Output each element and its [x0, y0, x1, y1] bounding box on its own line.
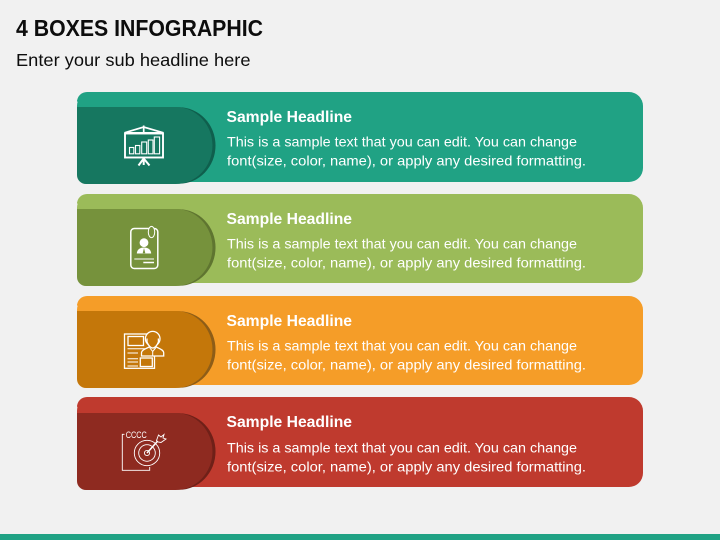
- subtitle: Enter your sub headline here: [16, 50, 250, 70]
- body text: font(size, color, name), or apply any desired formatting.: [227, 256, 586, 271]
- title: 4 BOXES INFOGRAPHIC: [16, 15, 263, 41]
- body text: This is a sample text that you can edit. You can change: [227, 135, 577, 150]
- icon: presentation board: [124, 126, 164, 166]
- headline: Sample Headline: [226, 414, 352, 431]
- panel: box 2 green: [77, 194, 643, 286]
- headline: Sample Headline: [226, 109, 352, 126]
- panel: box 3 orange: [77, 296, 643, 388]
- icon: document and person: [124, 331, 164, 368]
- body text: This is a sample text that you can edit. You can change: [227, 237, 577, 252]
- body text: [227, 441, 586, 475]
- icon: id card with clip: [131, 226, 158, 268]
- body text: [227, 339, 586, 373]
- body text: This is a sample text that you can edit. You can change: [227, 339, 577, 354]
- footer bar: [0, 534, 720, 540]
- icon: target with arrow: CCCC: [126, 430, 147, 440]
- panel: box 1 teal: [77, 92, 643, 184]
- headline: Sample Headline: [226, 211, 352, 228]
- headline: Sample Headline: [226, 313, 352, 330]
- body text: This is a sample text that you can edit. You can change: [227, 441, 577, 456]
- body text: [227, 135, 586, 169]
- panel: box 4 red: [77, 397, 643, 490]
- body text: font(size, color, name), or apply any desired formatting.: [227, 358, 586, 373]
- body text: [227, 237, 586, 271]
- body text: font(size, color, name), or apply any desired formatting.: [227, 154, 586, 169]
- body text: font(size, color, name), or apply any desired formatting.: [227, 460, 586, 475]
- icon: target with arrow: [122, 430, 166, 470]
